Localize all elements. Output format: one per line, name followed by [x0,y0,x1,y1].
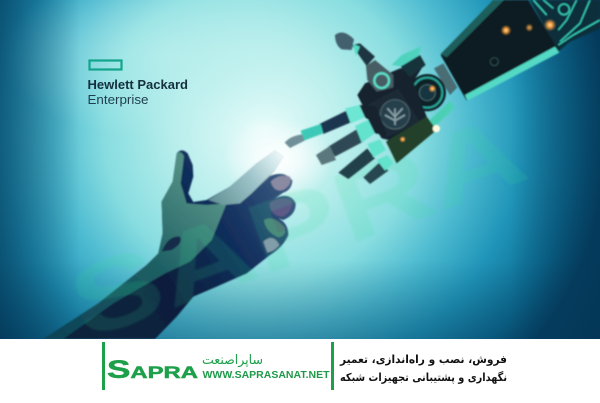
palm lower edge [393,101,455,163]
index finger [285,105,380,148]
forearm bright edge [465,47,559,101]
forearm block [441,0,559,101]
SAPRA logotype: S APRA [107,356,198,384]
middle divider [331,342,334,390]
robot hand [285,0,600,184]
index finger [208,151,283,205]
logo: Hewlett Packard Enterprise [88,60,188,107]
services line 1: فروش، نصب و راه‌اندازی، تعمیر [339,353,507,366]
logo: Hewlett Packard: Hewlett Packard [88,77,188,92]
forearm LEDs [501,25,511,35]
Persian brand name: ساپراصنعت [202,353,263,368]
hand silhouette [43,150,296,339]
logo: Enterprise: Enterprise [88,92,148,107]
side plate [392,46,422,67]
ring finger [338,139,386,179]
logo: green rectangle [90,60,122,70]
lit side of palm and arm [43,152,227,339]
circuit traces [533,0,600,45]
fingertips [271,176,291,191]
palm emblem [367,88,420,137]
thumb [335,32,393,92]
wrist joint [409,63,457,111]
little finger [363,155,393,184]
website: WWW.SAPRASANAT.NET [202,369,330,381]
middle finger [316,115,387,165]
palm [357,68,427,142]
services line 2: نگهداری و پشتیبانی تجهیزات شبکه [340,371,507,384]
watermark: SAPRA: SAPRA [55,93,540,361]
forearm circuit section [530,0,600,52]
palm mark [162,237,181,252]
left divider [102,342,105,390]
human hand [43,150,296,339]
light flare between fingertips [223,118,333,202]
footer band [0,339,600,403]
